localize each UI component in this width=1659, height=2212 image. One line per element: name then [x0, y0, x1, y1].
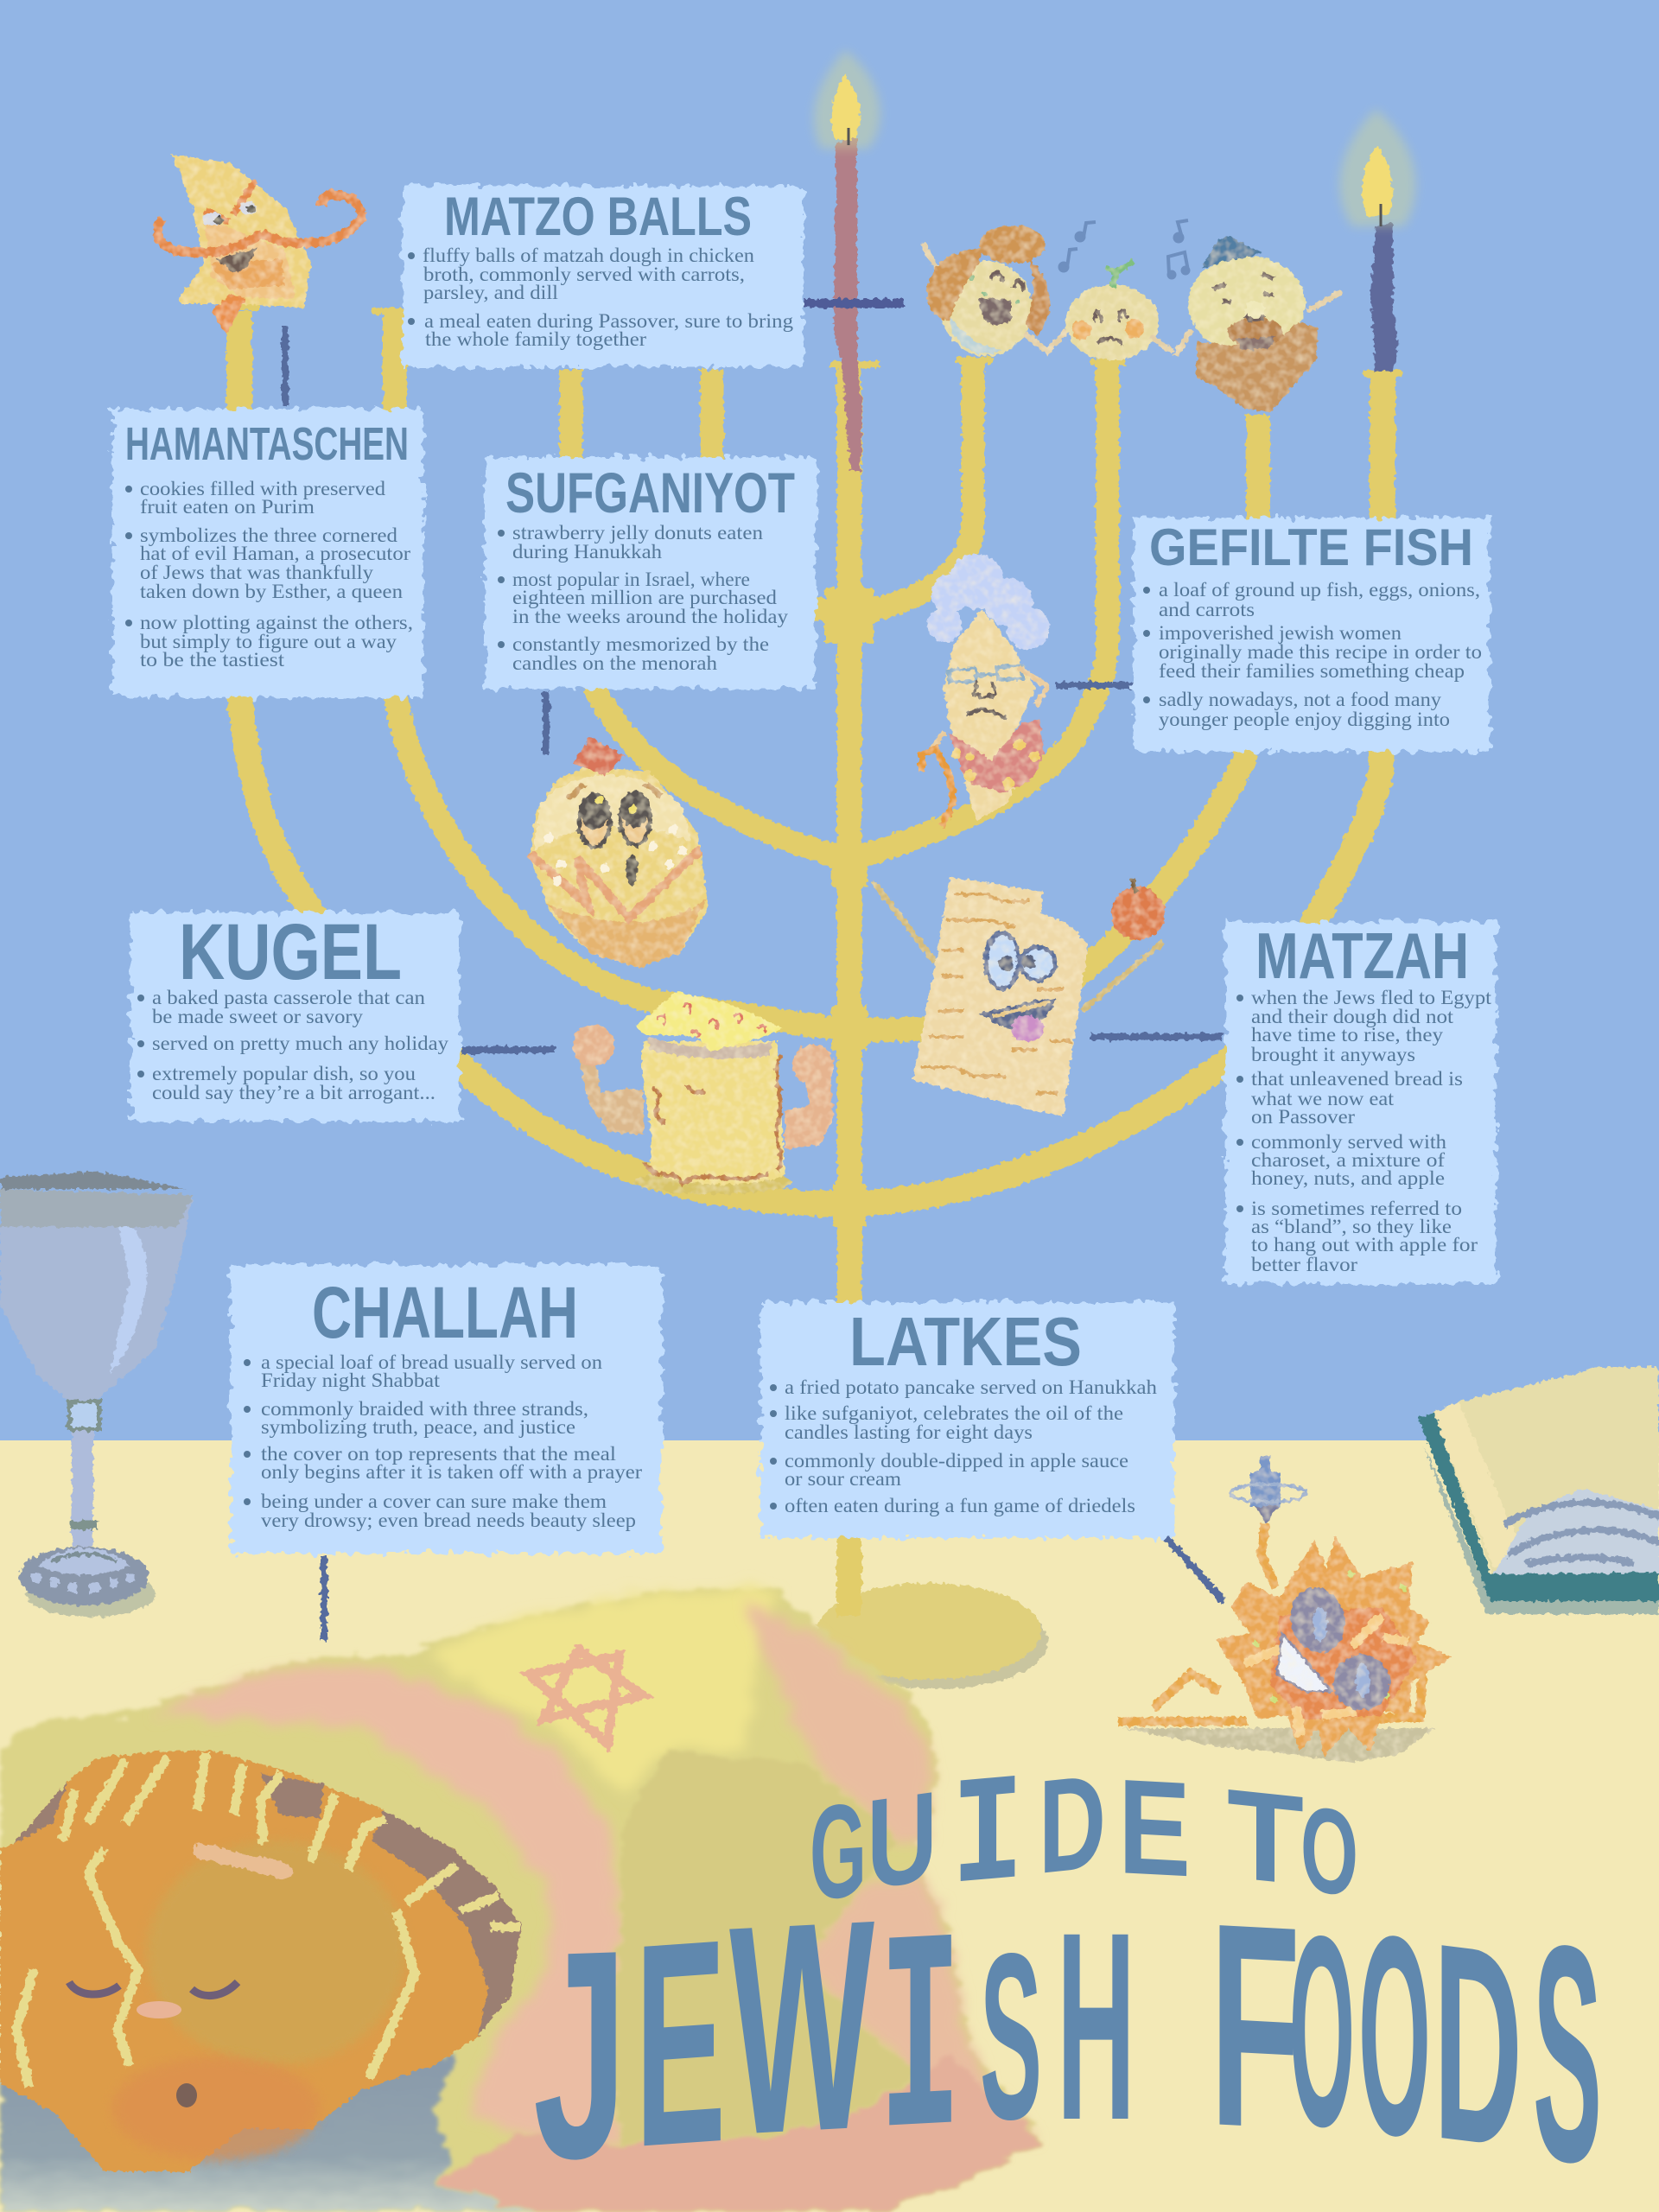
text block: matzah facts: charoset, a mixture of	[1251, 1149, 1445, 1171]
blue candle with flame	[1339, 109, 1415, 372]
title line: guide to: U	[867, 1764, 938, 1916]
text block: matzo balls facts: broth, commonly served with carrots,	[423, 264, 745, 285]
text block: matzah facts: better flavor	[1251, 1254, 1357, 1275]
text block: kugel facts: served on pretty much any holiday	[152, 1033, 449, 1054]
challah face	[69, 1982, 238, 2107]
character: matzah	[873, 877, 1165, 1117]
text block: latkes facts: a fried potato pancake served on Hanukkah	[785, 1376, 1158, 1398]
text block: matzah facts: is sometimes referred to	[1251, 1198, 1462, 1219]
cloth yellow area	[423, 1588, 778, 1798]
text block: matzo balls facts: fluffy balls of matzah dough in chicken	[423, 245, 755, 266]
heading: gefilte fish: GEFILTE FISH	[1149, 518, 1473, 576]
text block: matzo balls facts: the whole family together	[425, 328, 646, 350]
text block: matzah facts: and their dough did not	[1251, 1006, 1454, 1027]
heading: matzah: MATZAH	[1255, 919, 1469, 992]
title line: jewish foods: O	[1358, 1873, 1431, 2198]
heading: kugel: KUGEL	[179, 908, 402, 996]
text block: hamantaschen facts: taken down by Esther, a queen	[140, 581, 404, 602]
text block: hamantaschen facts: now plotting against the others,	[140, 612, 413, 633]
text block: sufganiyot facts: during Hanukkah	[512, 541, 663, 563]
text block: sufganiyot facts: eighteen million are purchased	[512, 587, 778, 608]
icon: goblet	[0, 1172, 193, 1617]
character: matzo ball mother	[923, 226, 1067, 356]
heading: matzo balls: MATZO BALLS	[444, 187, 752, 247]
text block: sufganiyot facts: most popular in Israel, where	[512, 569, 750, 590]
menorah second arm	[395, 311, 1258, 1031]
music note one	[1058, 249, 1077, 272]
text block: matzo balls facts	[408, 245, 794, 350]
candle cups	[220, 307, 1402, 373]
text block: sufganiyot facts: strawberry jelly donuts eaten	[512, 522, 764, 543]
panel: challah	[231, 1264, 662, 1554]
title line: guide to: I	[951, 1749, 1024, 1929]
connector lines	[285, 303, 1224, 1641]
text block: hamantaschen facts: to be the tastiest	[140, 649, 285, 671]
title	[533, 1745, 1602, 2212]
text block: hamantaschen facts: but simply to figure out a way	[140, 631, 397, 652]
text block: gefilte fish facts: sadly nowadays, not a food many	[1159, 689, 1442, 710]
menorah	[220, 307, 1402, 1689]
table surface	[0, 1440, 1659, 2212]
music note two	[1075, 222, 1096, 242]
text block: latkes facts: candles lasting for eight days	[785, 1421, 1033, 1443]
text block: challah facts: commonly braided with three strands,	[261, 1398, 588, 1420]
text block: sufganiyot facts: candles on the menorah	[512, 652, 718, 674]
challah braid stripes	[16, 1752, 519, 2088]
text block: latkes facts: commonly double-dipped in apple sauce	[785, 1450, 1128, 1471]
icon: music notes	[1058, 220, 1190, 279]
text block: hamantaschen facts: fruit eaten on Purim	[140, 496, 315, 518]
text block: hamantaschen facts	[125, 478, 413, 671]
character: matzo ball child	[1065, 262, 1191, 360]
character: kugel	[573, 991, 834, 1194]
title line: guide to: O	[1300, 1780, 1358, 1923]
panel: gefilte fish	[1134, 518, 1490, 752]
text block: challah facts: only begins after it is taken off with a prayer	[261, 1461, 642, 1483]
text block: matzah facts: that unleavened bread is	[1251, 1068, 1463, 1090]
text block: matzah facts: to hang out with apple for	[1251, 1234, 1478, 1255]
character: challah	[0, 1750, 521, 2171]
panel: latkes	[760, 1302, 1174, 1538]
text block: sufganiyot facts: constantly mesmorized by the	[512, 633, 769, 655]
title line: jewish foods: E	[635, 1878, 726, 2209]
text block: challah facts: the cover on top represents that the meal	[261, 1443, 616, 1465]
challah cloth	[0, 1588, 1042, 2212]
title line: guide to: D	[1039, 1745, 1106, 1902]
menorah outer arm	[239, 311, 1382, 1204]
text block: latkes facts: or sour cream	[785, 1468, 901, 1490]
cloth pink sweep	[151, 1663, 624, 2143]
music note four	[1167, 252, 1190, 279]
text block: challah facts: symbolizing truth, peace, and justice	[261, 1416, 575, 1438]
heading: hamantaschen: HAMANTASCHEN	[125, 418, 409, 470]
title line: jewish foods: S	[980, 1904, 1042, 2170]
challah centre glaze	[147, 1840, 406, 2065]
text block: challah facts	[244, 1351, 642, 1531]
challah crust	[13, 1773, 521, 2037]
text block: hamantaschen facts: cookies filled with preserved	[140, 478, 386, 499]
text block: gefilte fish facts: and carrots	[1159, 599, 1255, 620]
panel: kugel	[130, 908, 460, 1122]
red candle with flame	[814, 50, 880, 471]
music note three	[1173, 220, 1188, 243]
text block: hamantaschen facts: symbolizes the three cornered	[140, 524, 398, 546]
text block: matzah facts: what we now eat	[1251, 1088, 1395, 1109]
text block: matzah facts: as “bland”, so they like	[1251, 1216, 1452, 1237]
text block: gefilte fish facts: originally made this recipe in order to	[1159, 641, 1482, 663]
text block: challah facts: very drowsy; even bread needs beauty sleep	[261, 1510, 636, 1531]
title line: jewish foods: H	[1057, 1876, 1135, 2176]
cloth pink bottom band	[435, 2056, 1042, 2212]
menorah centre stem	[836, 364, 862, 1616]
text block: gefilte fish facts: younger people enjoy digging into	[1159, 709, 1450, 730]
menorah knobs	[825, 588, 874, 644]
character: hamantaschen	[158, 155, 361, 335]
title line: jewish foods	[533, 1857, 1602, 2212]
text block: matzah facts: on Passover	[1251, 1106, 1355, 1128]
text block: matzo balls facts: a meal eaten during Passover, sure to bring	[424, 310, 794, 332]
text block: kugel facts: a baked pasta casserole that can	[152, 987, 426, 1008]
character: gefilte fish grandmother	[922, 554, 1050, 827]
text block: matzo balls facts: parsley, and dill	[423, 282, 558, 303]
text block: matzah facts: honey, nuts, and apple	[1251, 1167, 1445, 1189]
menorah third arm	[571, 363, 1108, 861]
food characters	[158, 155, 1452, 1763]
cloth pink right fold	[743, 1603, 1037, 2143]
title line: jewish foods: W	[729, 1857, 876, 2198]
title line: guide to: T	[1227, 1763, 1304, 1912]
text block: latkes facts: like sufganiyot, celebrates the oil of the	[785, 1402, 1123, 1424]
title line: guide to	[810, 1745, 1358, 1929]
text block: gefilte fish facts: a loaf of ground up fish, eggs, onions,	[1159, 579, 1480, 601]
title line: guide to: G	[810, 1775, 867, 1928]
text block: kugel facts: could say they’re a bit arrogant...	[152, 1082, 435, 1103]
text block: kugel facts: extremely popular dish, so you	[152, 1063, 416, 1084]
character: sufganiyah	[530, 737, 709, 968]
heading: latkes: LATKES	[849, 1303, 1082, 1380]
text block: gefilte fish facts	[1143, 579, 1482, 730]
text block: kugel facts	[137, 987, 449, 1103]
text block: hamantaschen facts: hat of evil Haman, a prosecutor	[140, 543, 410, 564]
icon: dreidel	[1230, 1456, 1306, 1523]
text block: matzah facts: have time to rise, they	[1251, 1024, 1444, 1046]
title line: jewish foods: I	[879, 1885, 962, 2211]
latke shadow	[1123, 1728, 1434, 1763]
panel: hamantaschen	[112, 409, 423, 697]
text block: latkes facts	[770, 1376, 1158, 1516]
text block: matzah facts: commonly served with	[1251, 1131, 1447, 1153]
panel: matzah	[1225, 919, 1496, 1284]
title line: jewish foods: O	[1289, 1877, 1355, 2186]
icon: open book	[1418, 1367, 1659, 1614]
text block: challah facts: a special loaf of bread usually served on	[261, 1351, 603, 1373]
text block: challah facts: being under a cover can sure make them	[261, 1491, 607, 1512]
title line: guide to: E	[1118, 1751, 1191, 1905]
background wall	[0, 0, 1659, 1441]
title line: jewish foods: J	[533, 1888, 627, 2212]
title line: jewish foods: F	[1210, 1863, 1300, 2190]
text block: latkes facts: often eaten during a fun game of driedels	[785, 1495, 1135, 1516]
heading: challah: CHALLAH	[312, 1272, 578, 1353]
text block: challah facts: Friday night Shabbat	[261, 1370, 441, 1391]
text block: matzah facts: when the Jews fled to Egypt	[1251, 987, 1492, 1008]
icon: star of david on cloth	[530, 1649, 643, 1744]
panel: matzo balls	[402, 186, 804, 367]
text block: sufganiyot facts	[498, 522, 789, 674]
text block: matzah facts: brought it anyways	[1251, 1044, 1415, 1065]
cloth shaded panel	[605, 1751, 916, 2143]
panel: sufganiyot	[485, 457, 816, 689]
text block: kugel facts: be made sweet or savory	[152, 1006, 364, 1027]
text block: hamantaschen facts: of Jews that was thankfully	[140, 562, 374, 583]
text block: gefilte fish facts: impoverished jewish women	[1159, 622, 1402, 644]
text block: matzah facts	[1236, 987, 1492, 1275]
text block: sufganiyot facts: in the weeks around the holiday	[512, 606, 789, 627]
challah shadow	[0, 2056, 536, 2212]
text block: gefilte fish facts: feed their families something cheap	[1159, 660, 1465, 682]
menorah base	[817, 1583, 1048, 1689]
character: latke	[1118, 1523, 1452, 1757]
challah highlight	[194, 1844, 292, 1879]
heading: sufganiyot: SUFGANIYOT	[505, 461, 795, 524]
title line: jewish foods: D	[1433, 1884, 1522, 2207]
menorah inner arm	[712, 359, 973, 616]
character: matzo ball father	[1188, 236, 1341, 412]
